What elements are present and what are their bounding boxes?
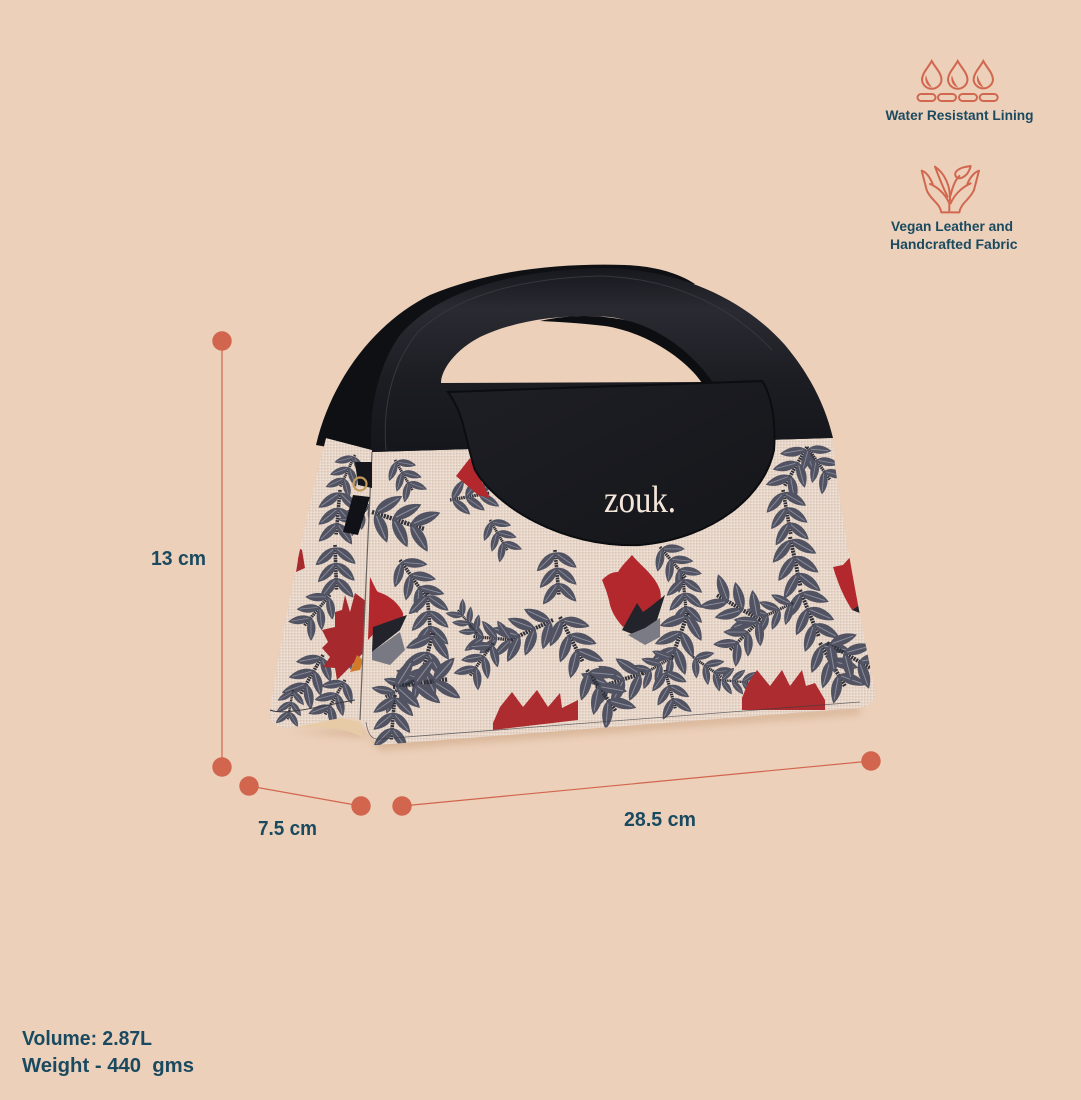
handbag photo illustration xyxy=(270,265,894,753)
leaf sprigs: right vine xyxy=(701,445,870,704)
depth dimension line xyxy=(239,776,371,816)
back handle xyxy=(316,265,695,460)
label: water resistant lining: Water Resistant Lining xyxy=(886,108,1034,123)
side seam xyxy=(360,452,372,720)
volume and weight xyxy=(22,1027,194,1077)
zouk logo: zouk. xyxy=(604,479,676,521)
side flower xyxy=(322,593,367,680)
front panel fabric xyxy=(360,434,894,753)
front handle xyxy=(371,268,833,456)
handle inner rim xyxy=(540,316,713,383)
ground shadow xyxy=(290,706,860,750)
label: vegan leather and handcrafted fabric: Vegan Leather and xyxy=(891,219,1013,234)
strap clasp xyxy=(343,462,372,535)
depth label: 7.5 cm xyxy=(258,817,317,840)
width label: 28.5 cm xyxy=(624,808,696,831)
leaf sprigs: left vines xyxy=(371,459,554,746)
label: vegan leather and handcrafted fabric: Handcrafted Fabric xyxy=(890,237,1018,252)
width dimension line xyxy=(392,751,881,816)
side gusset xyxy=(270,438,372,728)
icon: water resistant drops xyxy=(918,61,998,101)
label: vegan leather and handcrafted fabric xyxy=(890,219,1018,252)
inner gusset base xyxy=(295,718,364,738)
flap xyxy=(448,381,774,545)
volume and weight: Volume: 2.87L xyxy=(22,1027,152,1050)
red flowers xyxy=(602,555,661,627)
handle stitching xyxy=(385,276,772,450)
height label: 13 cm xyxy=(151,547,206,570)
volume and weight: Weight - 440 gms xyxy=(22,1054,194,1077)
side panel stitching xyxy=(270,700,355,712)
icon: hands holding leaf xyxy=(922,166,979,212)
leaf sprigs: centre vine xyxy=(536,544,756,728)
front panel stitching xyxy=(366,702,860,739)
height dimension line xyxy=(212,331,232,777)
